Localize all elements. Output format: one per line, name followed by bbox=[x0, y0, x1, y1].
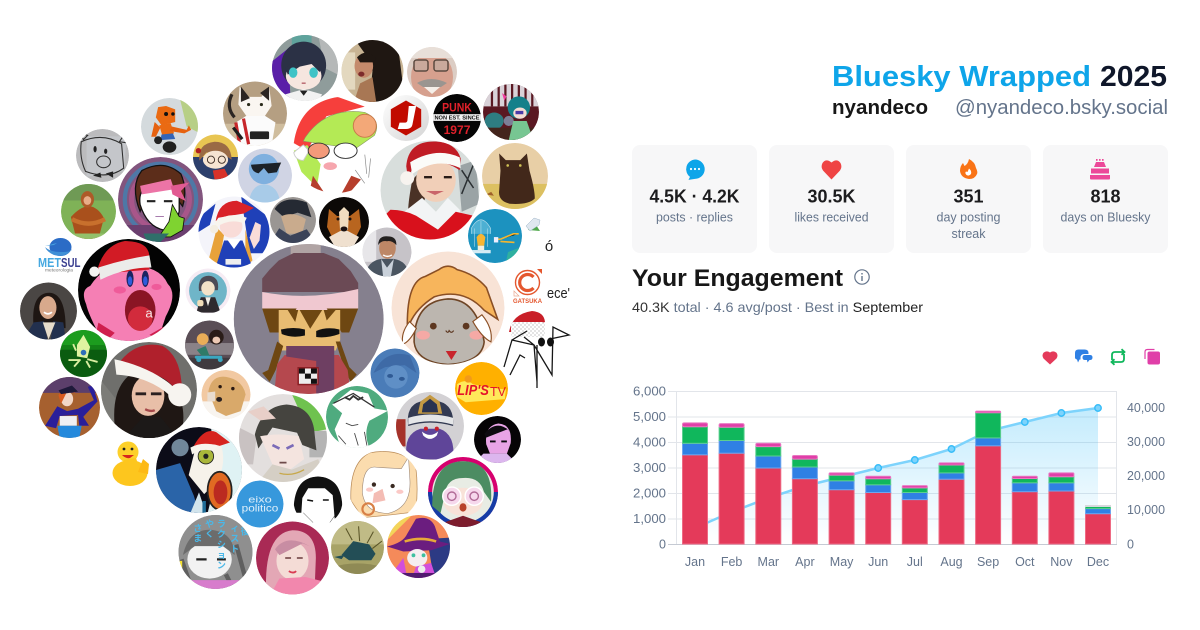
avatar: santa anime in blue dress bbox=[198, 196, 270, 268]
avatar: punk: NON EST. SINCE bbox=[434, 115, 480, 121]
month labels: Mar bbox=[758, 555, 779, 569]
icon: speech bubble bbox=[686, 160, 705, 180]
bar: Mar bbox=[756, 443, 781, 544]
avatar: punk: PUNK bbox=[442, 100, 472, 114]
avatar: cat in jersey bbox=[223, 82, 287, 146]
icon: birthday cake bbox=[1090, 159, 1110, 180]
panel: days on Bluesky: days on Bluesky bbox=[1060, 210, 1151, 224]
icon: quotes squares bbox=[1145, 350, 1160, 364]
avatar: red J hexagon bbox=[383, 95, 429, 141]
avatar: manga with blue katakana: ト bbox=[230, 544, 239, 554]
month labels: Nov bbox=[1050, 555, 1073, 569]
month labels bbox=[685, 555, 1109, 569]
month labels: Jan bbox=[685, 555, 705, 569]
panel: day posting streak: day posting bbox=[936, 210, 1001, 224]
avatar: blue tinted anime bbox=[370, 348, 420, 398]
panel: posts and replies bbox=[632, 145, 757, 253]
avatar: eixo politico logo: eixo bbox=[248, 494, 272, 505]
month labels: Apr bbox=[795, 555, 815, 569]
panel: days on Bluesky: 818 bbox=[1090, 186, 1120, 206]
stacked bars bbox=[682, 411, 1110, 544]
avatar: METSUL logo: meteorologia bbox=[45, 268, 74, 272]
bar: Nov bbox=[1049, 473, 1074, 544]
legend icons bbox=[1042, 349, 1160, 365]
month labels: Jun bbox=[868, 555, 888, 569]
panel: day posting streak bbox=[906, 145, 1031, 253]
avatar: eixo politico logo: politico bbox=[242, 504, 279, 515]
avatar: manga black hair bbox=[294, 476, 342, 526]
bar: Apr bbox=[792, 456, 817, 544]
avatar: parrot with santa hat bbox=[156, 427, 242, 513]
month labels: May bbox=[830, 555, 854, 569]
avatar: Kirby in santa hat: a bbox=[145, 306, 153, 321]
icon: heart bbox=[822, 160, 841, 180]
avatar: broken image with alt letter bbox=[526, 218, 553, 255]
chart grid bbox=[668, 391, 1117, 544]
avatar: brown kitten painting bbox=[482, 143, 548, 209]
avatar: manga with blue katakana: ま bbox=[193, 534, 202, 544]
avatar: man in suit bbox=[362, 228, 412, 276]
month labels: Oct bbox=[1015, 555, 1035, 569]
avatar: pink girl on black bbox=[474, 416, 521, 463]
bar: Dec bbox=[1086, 506, 1110, 544]
avatar: manga with blue katakana: 後 bbox=[241, 525, 250, 536]
avatar: manga with blue katakana bbox=[178, 515, 252, 590]
avatar: Kirby in santa hat bbox=[78, 239, 180, 341]
avatar: woman in santa hat bbox=[380, 140, 480, 240]
panel: likes received: 30.5K bbox=[808, 186, 856, 206]
left axis labels: 3,000 bbox=[633, 461, 666, 475]
month labels: Dec bbox=[1087, 555, 1109, 569]
avatar: METSUL logo: SUL bbox=[61, 255, 81, 270]
month labels: Feb bbox=[721, 555, 742, 569]
bar: Oct bbox=[1012, 476, 1037, 544]
bar: Feb bbox=[719, 424, 744, 544]
panel: day posting streak: streak bbox=[952, 227, 986, 241]
avatar: Lip's TV logo: LIP'S bbox=[457, 383, 489, 399]
icon: likes heart bbox=[1042, 351, 1058, 364]
left axis labels: 4,000 bbox=[633, 436, 666, 450]
bar: May bbox=[829, 473, 854, 544]
avatar: golden dog bbox=[202, 370, 250, 419]
avatar: curly haired woman in santa hat bbox=[101, 342, 197, 438]
avatar: manga with blue katakana: く bbox=[205, 529, 214, 539]
avatar: purple jacket dancer bbox=[39, 377, 100, 438]
avatar: METSUL logo bbox=[38, 238, 81, 272]
avatar: chibi on scooter bbox=[185, 320, 234, 370]
icon: reposts arrows bbox=[1112, 349, 1124, 365]
avatar: green bg white hat drawing bbox=[326, 386, 388, 448]
avatar: pink hair woman bbox=[256, 522, 329, 594]
cumulative area bbox=[695, 408, 1098, 544]
avatar: manga with blue katakana: や bbox=[205, 519, 214, 529]
right axis labels: 0 bbox=[1127, 538, 1134, 552]
avatar: METSUL logo: MET bbox=[38, 255, 61, 270]
bar: Sep bbox=[976, 411, 1001, 544]
month labels: Jul bbox=[907, 555, 923, 569]
cumulative line bbox=[695, 405, 1101, 528]
panel: likes received: likes received bbox=[794, 210, 869, 224]
bar: Jul bbox=[902, 486, 927, 544]
avatar: woman with dark hair bbox=[342, 40, 404, 102]
left axis labels: 6,000 bbox=[633, 384, 666, 398]
panel: posts and replies: 4.5K · 4.2K bbox=[650, 186, 740, 206]
right axis labels: 10,000 bbox=[1127, 503, 1165, 517]
avatar: manga with blue katakana: ョ bbox=[217, 550, 226, 560]
title: 2025 bbox=[1100, 61, 1167, 93]
avatar: santa stick figure drawing bbox=[504, 311, 569, 388]
icon: flame bbox=[960, 159, 977, 179]
avatar: Lip's TV logo bbox=[455, 362, 508, 415]
heading: your engagement: Your Engagement bbox=[632, 265, 843, 292]
avatar: green hair spiral glasses bbox=[428, 457, 498, 527]
bar: Aug bbox=[939, 463, 964, 544]
avatar: light bulb in cage bbox=[468, 209, 522, 263]
avatar: santa green hair character bbox=[293, 97, 378, 193]
panel: posts and replies: posts · replies bbox=[656, 210, 733, 224]
avatar: broken image with alt letter: ó bbox=[545, 238, 553, 255]
avatar: pig drawing bbox=[76, 129, 129, 182]
bar: Jan bbox=[682, 423, 708, 544]
left axis labels: 0 bbox=[659, 538, 666, 552]
panel: likes received bbox=[769, 145, 894, 253]
right axis labels bbox=[1127, 401, 1165, 552]
avatar cluster bbox=[20, 35, 570, 594]
left axis labels: 2,000 bbox=[633, 486, 666, 500]
avatar: woman in blazer bbox=[20, 282, 77, 340]
avatar: manga with blue katakana: ン bbox=[217, 560, 226, 570]
display name and handle bbox=[832, 97, 1168, 119]
avatar: rubber duck bbox=[112, 442, 149, 486]
avatar: manga with blue katakana: さ bbox=[193, 523, 202, 533]
panel: days on Bluesky bbox=[1043, 145, 1168, 253]
avatar: white cat with cushion bbox=[350, 451, 418, 518]
avatar: manga with blue katakana: ク bbox=[217, 529, 226, 539]
avatar: porcupine bbox=[331, 521, 384, 574]
bar: Jun bbox=[866, 476, 891, 544]
avatar: punk bbox=[433, 94, 481, 142]
avatar: large pixel art girl bbox=[234, 244, 384, 394]
title: Bluesky Wrapped bbox=[832, 61, 1091, 93]
icon: info bbox=[855, 270, 869, 284]
avatar: headband character bbox=[118, 157, 203, 242]
panel: day posting streak: 351 bbox=[954, 186, 984, 206]
right axis labels: 40,000 bbox=[1127, 401, 1165, 415]
avatar: celebi bbox=[60, 330, 107, 377]
avatar: mochi cat with orange hood bbox=[392, 252, 504, 364]
display name and handle: @nyandeco.bsky.social bbox=[955, 97, 1168, 119]
avatar: dark haired manga man bbox=[270, 197, 316, 243]
avatar: blue figure with sunglasses bbox=[238, 148, 292, 202]
avatar: orangutan bbox=[61, 184, 116, 239]
avatar: manga with blue katakana: ス bbox=[230, 534, 239, 544]
display name and handle: nyandeco bbox=[832, 97, 928, 119]
avatar: Crash Bandicoot plush bbox=[141, 98, 198, 155]
month labels: Aug bbox=[940, 555, 963, 569]
left axis labels: 5,000 bbox=[633, 410, 666, 424]
right axis labels: 30,000 bbox=[1127, 435, 1165, 449]
avatar: chibi with round glasses bbox=[193, 134, 238, 180]
avatar: older man with glasses bbox=[407, 47, 457, 102]
avatar: punk: 1977 bbox=[444, 123, 471, 137]
avatar: Lip's TV logo: TV bbox=[490, 384, 506, 399]
avatar: manga with blue katakana: ラ bbox=[217, 519, 226, 529]
avatar: anime girl dark hair bbox=[272, 35, 338, 101]
icon: replies bubbles bbox=[1075, 350, 1092, 362]
avatar: Gatsuka logo with clipped alt text: GATSUKA bbox=[513, 299, 543, 305]
left axis labels: 1,000 bbox=[633, 512, 666, 526]
avatar: Gatsuka logo with clipped alt text: ece' bbox=[547, 285, 570, 302]
month labels: Sep bbox=[977, 555, 999, 569]
avatar: green haired boy bbox=[239, 394, 327, 482]
right axis labels: 20,000 bbox=[1127, 469, 1165, 483]
avatar: eixo politico logo bbox=[236, 480, 284, 528]
left axis labels bbox=[633, 384, 666, 552]
avatar: manga with blue katakana: ィ bbox=[230, 523, 239, 533]
avatar: plush with LA beanie bbox=[396, 392, 464, 460]
avatar: green anime bbox=[483, 84, 539, 140]
engagement summary: 40.3K total · 4.6 avg/post · Best in September bbox=[632, 299, 923, 315]
avatar: anime man with glasses bbox=[186, 268, 230, 314]
avatar: Gatsuka logo with clipped alt text bbox=[513, 269, 570, 305]
chart: monthly engagement stacked bars with cumulative line bbox=[633, 384, 1165, 569]
avatar: manga with blue katakana: シ bbox=[217, 540, 226, 550]
avatar: witch bbox=[387, 515, 450, 578]
avatar: collie dog bbox=[319, 197, 369, 247]
